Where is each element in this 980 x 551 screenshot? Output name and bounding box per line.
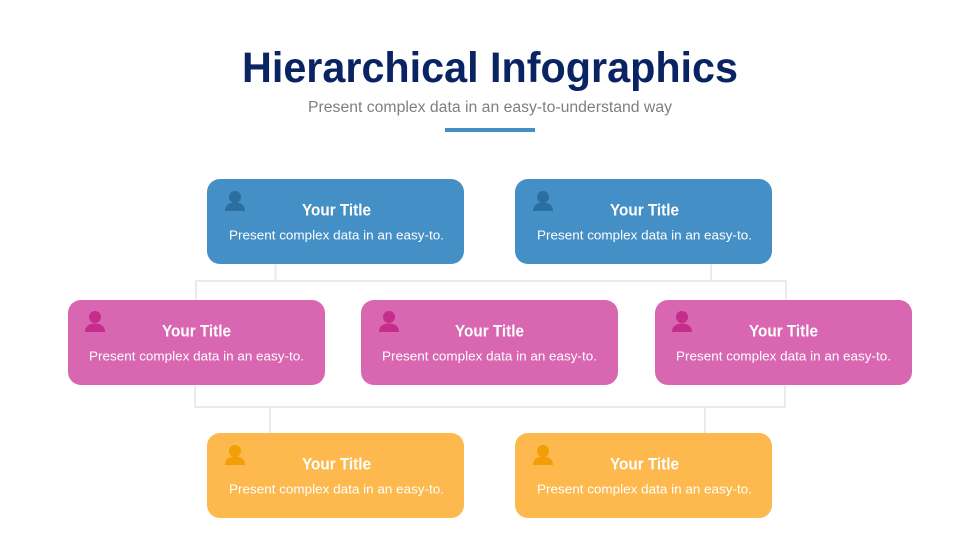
subtitle: Present complex data in an easy-to-understand way — [308, 99, 672, 116]
card title: Your Title — [455, 322, 524, 340]
panel: pink card 3 — [655, 300, 912, 385]
panel: pink card 2 — [361, 300, 618, 385]
card text: Present complex data in an easy-to. — [537, 228, 752, 242]
card text: Present complex data in an easy-to. — [382, 348, 597, 364]
panel: blue card 2 — [515, 179, 772, 264]
card title: Your Title — [162, 322, 231, 340]
connector: middle row to bottom row — [195, 385, 785, 433]
card title: Your Title — [302, 202, 371, 220]
card text: Present complex data in an easy-to. — [89, 348, 304, 364]
card title: Your Title — [610, 202, 679, 220]
card title: Your Title — [302, 456, 371, 474]
card text: Present complex data in an easy-to. — [229, 482, 444, 496]
icon: person — [379, 311, 399, 332]
icon: person — [225, 445, 245, 465]
card title: Your Title — [610, 456, 679, 474]
icon: person — [533, 191, 553, 211]
panel: orange card 1 — [207, 433, 464, 518]
card text: Present complex data in an easy-to. — [676, 348, 891, 364]
title: Hierarchical Infographics — [242, 44, 738, 92]
icon: person — [672, 311, 692, 332]
icon: person — [225, 191, 245, 211]
card title: Your Title — [749, 322, 818, 340]
icon: person — [85, 311, 105, 332]
title accent bar — [445, 128, 535, 132]
card text: Present complex data in an easy-to. — [229, 228, 444, 242]
card text: Present complex data in an easy-to. — [537, 482, 752, 496]
panel: orange card 2 — [515, 433, 772, 518]
panel: pink card 1 — [68, 300, 325, 385]
icon: person — [533, 445, 553, 465]
panel: blue card 1 — [207, 179, 464, 264]
connector: top row to middle row — [196, 264, 786, 300]
